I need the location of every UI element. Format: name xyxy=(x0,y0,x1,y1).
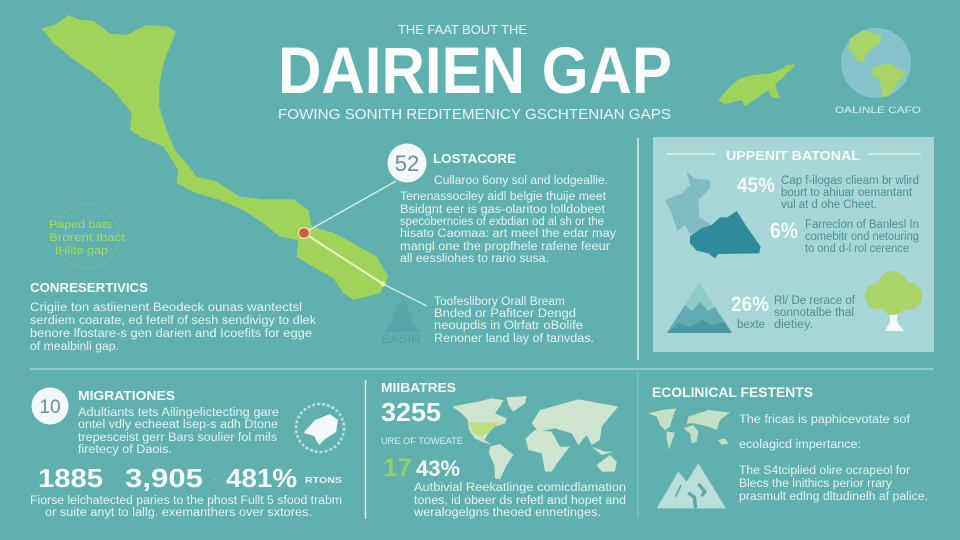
icon: number badge 10 xyxy=(32,388,68,424)
stats row: 1885 xyxy=(38,463,103,493)
panel: uppenit batonal xyxy=(653,137,934,352)
icon: globe: OALINLE CAFO xyxy=(835,105,921,115)
panel: migrationes: MIGRATIONES xyxy=(78,388,175,403)
panel: migrationes: Fiorse lelchatected paries to the phost Fullt 5 sfood trabm xyxy=(30,495,342,507)
panel: migrationes xyxy=(30,388,344,519)
text block: lower callout: Toofeslibory Orall Bream xyxy=(434,296,565,308)
title block: THE FAAT BOUT THE xyxy=(398,22,527,37)
icon: faint tree with label: EASIR xyxy=(381,332,421,346)
panel: migrationes: firetecy of Daois. xyxy=(78,444,172,456)
panel: miibatres: 43% xyxy=(416,456,460,481)
stat: 26% xyxy=(731,293,856,331)
text block: conservatives xyxy=(30,280,316,353)
text block: lower callout: Bnded or Pafitcer Dengd xyxy=(434,308,576,320)
panel: lostacore: LOSTACORE xyxy=(433,151,516,166)
text block: conservatives: Crigiie ton astiienent Beodeck ounas wantectsl xyxy=(30,302,302,314)
panel: lostacore: Bsidgnt eer is gas-olaritoo lolldobeet xyxy=(400,204,606,216)
icon: faint tree with label xyxy=(381,298,421,346)
stat: 6%: 6% xyxy=(770,218,798,243)
panel: miibatres: 3255 xyxy=(381,397,441,427)
panel: lostacore: all eessliohes to rario susa. xyxy=(400,253,549,265)
icon: tree xyxy=(865,271,922,331)
icon: region map xyxy=(665,172,761,258)
stat: 45%: bourt to ahiuar oemantant xyxy=(781,187,913,199)
icon: globe xyxy=(835,28,921,115)
panel: migrationes: ontel vdly echeeat lsep-s adh Dtone xyxy=(78,419,278,431)
panel: lostacore: mangl one the propfhele rafene feeur xyxy=(400,241,610,253)
stat: 45%: Cap f-ilogas clieam br wlird xyxy=(781,175,919,187)
callout: small green circle note: Paped bats xyxy=(49,219,113,231)
panel: miibatres: 17 xyxy=(383,454,412,482)
panel: ecolinical festents: ecolagicd impertance: xyxy=(739,439,861,451)
stats row: 481% xyxy=(226,463,297,493)
panel: lostacore xyxy=(388,144,616,265)
stat: 45%: vul at d ohe Cheet. xyxy=(781,199,877,211)
panel: lostacore: specoberncies of exbdian od al sh or the xyxy=(400,216,604,228)
stats row xyxy=(38,463,342,493)
icon: number badge 52 xyxy=(388,144,426,182)
stats row: 3,905 xyxy=(125,463,203,493)
panel: miibatres: MIIBATRES xyxy=(381,380,456,395)
stat: 6%: Farreclon of Banlesl In xyxy=(805,219,919,231)
heading: UPPENIT BATONAL xyxy=(726,148,860,163)
stat: 6%: to ond d-l rol cerence xyxy=(805,243,909,255)
panel: miibatres: tones, id obeer ds refetl and hopet and xyxy=(414,495,626,507)
panel: ecolinical festents: ECOLINICAL FESTENTS xyxy=(652,384,813,400)
panel: ecolinical festents: prasmult edlng dltudinelh af palice. xyxy=(739,491,928,503)
text block: conservatives: of mealbinli gap. xyxy=(30,341,119,353)
icon: globe badge xyxy=(296,404,344,452)
panel: ecolinical festents xyxy=(648,384,928,508)
panel: miibatres xyxy=(381,380,626,519)
panel: miibatres: Autbivial Reekatlinge comicdlamation xyxy=(414,482,626,494)
stats row: RTONS xyxy=(305,475,342,485)
stats row: · xyxy=(213,474,217,485)
text block: conservatives: benore lfostare-s gen darien and Icoefits for egge xyxy=(30,328,312,340)
title block: FOWING SONITH REDITEMENICY GSCHTENIAN GAPS xyxy=(278,106,671,123)
icon: mountains xyxy=(657,463,726,508)
stat: 26%: dietiey. xyxy=(774,319,813,331)
panel: lostacore: Tenenassociley aidl belgie thuije meet xyxy=(400,191,607,203)
icon: mountain xyxy=(667,283,732,333)
callout: small green circle note xyxy=(49,204,125,268)
panel: lostacore: hisato Caomaa: art meel the edar may xyxy=(400,228,616,240)
panel: ecolinical festents: The S4tciplied olire ocrapeol for xyxy=(739,465,910,477)
title block xyxy=(278,22,672,123)
text block: lower callout xyxy=(434,296,594,345)
text block: conservatives: serdiem coarate, ed fetelf of sesh sendivigy to dlek xyxy=(30,315,316,327)
text block: lower callout: neoupdis in Olrfatr oBolife xyxy=(434,320,583,332)
chart: world map xyxy=(452,396,618,479)
panel: migrationes: trepesceist gerr Bars soulier fol mils xyxy=(78,432,277,444)
stats row: · xyxy=(112,474,116,485)
panel: migrationes: Adultiants tets Ailingelictecting gare xyxy=(78,407,279,419)
text block: conservatives: CONRESERTIVICS xyxy=(30,280,148,295)
icon: small world map xyxy=(648,408,730,450)
panel: migrationes: or suite anyt to lallg. exemanthers over sxtores. xyxy=(45,507,312,519)
callout: small green circle note: tHlite gap xyxy=(55,245,108,257)
stat: 26%: 26% xyxy=(731,293,769,316)
panel: miibatres: URE OF TOWEATE xyxy=(381,436,463,446)
callout: small green circle note: Brorent Ibact xyxy=(49,232,125,244)
panel: miibatres: weralogelgns theoed ennetinges. xyxy=(413,507,601,519)
stat: 6% xyxy=(770,218,919,255)
icon: number badge 10: 10 xyxy=(39,397,61,418)
stat: 45% xyxy=(737,174,919,211)
panel: ecolinical festents: The fricas is paphicevotate sof xyxy=(739,414,911,426)
stat: 26%: bexte xyxy=(737,319,765,331)
icon: small green region xyxy=(718,64,796,106)
stat: 26%: Rl/ De rerace of xyxy=(774,295,856,307)
panel: lostacore: Cullaroo 6ony sol and lodgeallie. xyxy=(434,175,608,187)
map: isthmus xyxy=(42,15,427,306)
text block: lower callout: Renoner land lay of tanvdas. xyxy=(434,333,594,345)
stat: 6%: comebitr ond netouring xyxy=(805,231,919,243)
title block: DAIRIEN GAP xyxy=(278,33,672,107)
stat: 45%: 45% xyxy=(737,174,775,197)
panel: ecolinical festents: Blecs the lnithics perior rrary xyxy=(739,478,892,490)
icon: number badge 52: 52 xyxy=(395,151,419,176)
stat: 26%: sonnotalbe thal xyxy=(774,307,854,319)
